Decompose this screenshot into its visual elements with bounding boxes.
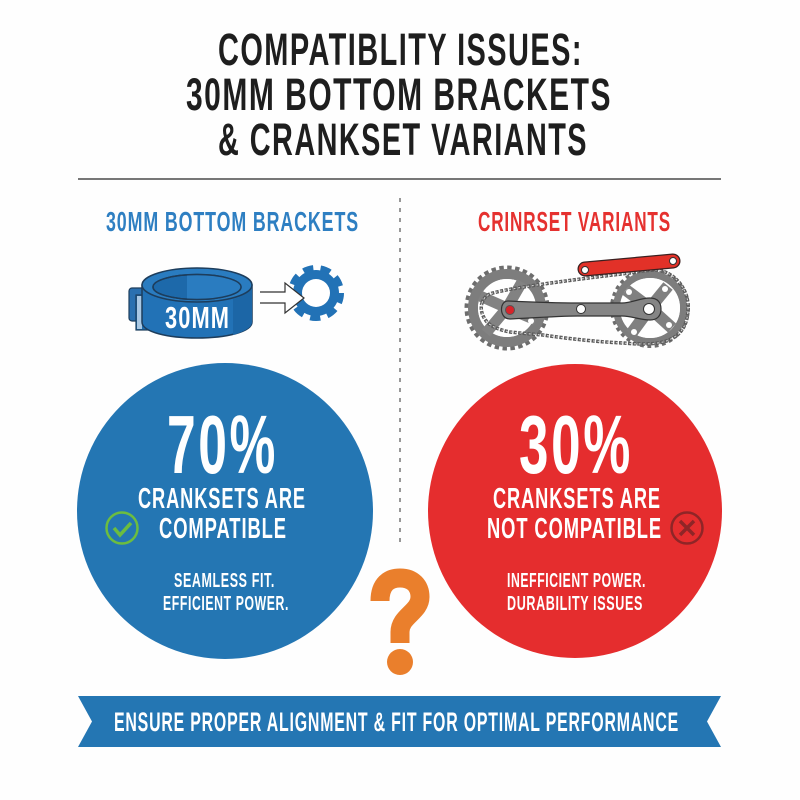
crank arm — [501, 298, 661, 320]
icon: check mark — [106, 512, 138, 544]
label: cranksets are not compatible: CRANKSETS ARE — [493, 483, 661, 515]
note: inefficient power: INEFFICIENT POWER. — [507, 570, 646, 592]
chain — [481, 270, 688, 344]
icon: bottom bracket ring with arrow and gear — [129, 268, 340, 338]
ring body — [142, 268, 252, 338]
ring clamp — [129, 288, 153, 330]
title: COMPATIBLITY ISSUES: — [218, 24, 583, 75]
label: cranksets are compatible — [138, 483, 306, 545]
panel: 70 percent compatible — [77, 363, 373, 659]
label: cranksets are not compatible — [487, 483, 662, 545]
title — [186, 24, 612, 165]
left sprocket — [467, 268, 547, 348]
note: seamless fit: SEAMLESS FIT. — [174, 570, 275, 592]
title: & CRANKSET VARIANTS — [218, 114, 588, 165]
stat: 70%: 70% — [167, 398, 278, 491]
right sprocket — [612, 270, 688, 346]
label: cranksets are not compatible: NOT COMPATIBLE — [487, 513, 662, 545]
stat: 30%: 30% — [519, 398, 633, 491]
note: seamless fit: EFFICIENT POWER. — [163, 593, 289, 615]
icon: crankset with chain — [467, 258, 688, 348]
label: cranksets are compatible: COMPATIBLE — [159, 513, 287, 545]
heading: 30mm bottom brackets: 30MM BOTTOM BRACKETS — [106, 206, 359, 237]
red crank — [582, 258, 676, 274]
arrow — [260, 283, 304, 313]
panel: 30 percent not compatible — [428, 364, 722, 658]
icon: question mark — [380, 578, 420, 675]
note: inefficient power — [507, 570, 646, 615]
icon: bottom bracket ring with arrow and gear: 30MM — [165, 300, 230, 335]
label: cranksets are compatible: CRANKSETS ARE — [138, 483, 306, 515]
icon: cross mark — [672, 512, 702, 544]
heading: crankset variants: CRINRSET VARIANTS — [478, 206, 671, 237]
note: seamless fit — [163, 570, 289, 615]
banner — [78, 696, 721, 747]
note: inefficient power: DURABILITY ISSUES — [507, 593, 643, 615]
gear — [292, 268, 340, 318]
